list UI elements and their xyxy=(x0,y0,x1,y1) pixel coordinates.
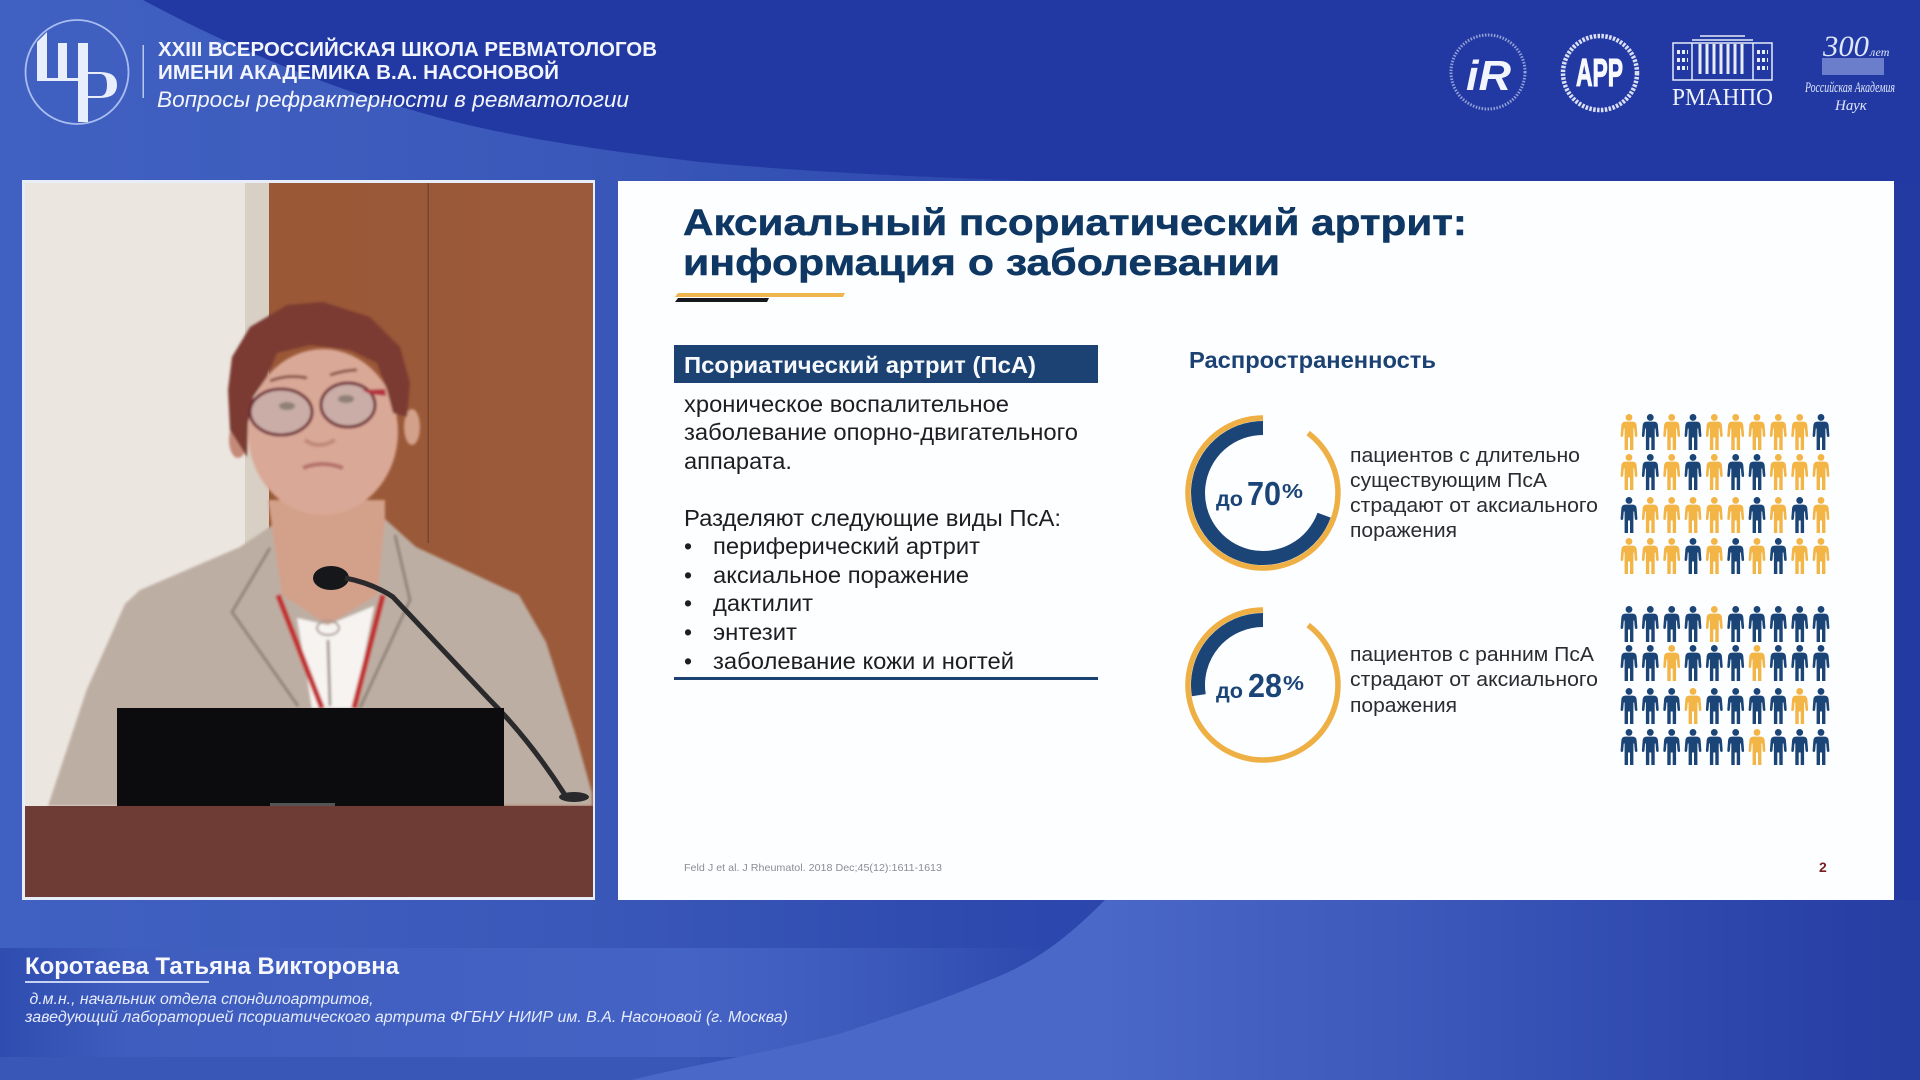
logo: 300 лет РАН: 300 xyxy=(1822,30,1869,63)
donut: 28% xyxy=(1188,610,1338,760)
definition heading bar xyxy=(674,345,1098,383)
text: 28% description: пациентов с ранним ПсА xyxy=(1350,644,1595,666)
pictogram: 28% xyxy=(1621,606,1829,765)
logo: АРР: АРР xyxy=(1576,52,1623,95)
donut: 28%: до xyxy=(1216,680,1243,703)
definition heading bar: Псориатический артрит (ПсА) xyxy=(684,352,1036,378)
definition text: заболевание опорно-двигательного xyxy=(684,419,1078,445)
speaker credentials: д.м.н., начальник отдела спондилоартритов, xyxy=(30,991,374,1008)
header: divider xyxy=(142,45,144,98)
donut: 28%: % xyxy=(1283,673,1304,695)
list of PsA forms: дактилит xyxy=(713,590,813,616)
definition text xyxy=(684,391,1078,531)
donut: 70% xyxy=(1188,418,1338,568)
list of PsA forms: • xyxy=(684,590,692,616)
title underline accent xyxy=(675,293,845,302)
speaker credentials xyxy=(24,991,788,1026)
list of PsA forms: периферический артрит xyxy=(713,533,980,559)
list of PsA forms: • xyxy=(684,562,692,588)
panel: speaker video xyxy=(22,180,595,900)
text: 28% description: поражения xyxy=(1350,695,1457,717)
donut: 28%: 28 xyxy=(1248,667,1282,704)
logo: iR: iR xyxy=(1466,52,1512,99)
text: 70% description: существующим ПсА xyxy=(1350,470,1548,492)
text: 70% description: пациентов с длительно xyxy=(1350,445,1580,467)
text: 70% description: страдают от аксиального xyxy=(1350,495,1598,517)
header: event title: Вопросы рефрактерности в ревматологии xyxy=(157,87,629,112)
definition text: хроническое воспалительное xyxy=(684,391,1009,417)
list of PsA forms: заболевание кожи и ногтей xyxy=(713,648,1014,674)
definition text: аппарата. xyxy=(684,448,792,474)
slide title: Аксиальный псориатический артрит: xyxy=(683,202,1467,243)
text: 28% description xyxy=(1350,644,1598,717)
definition text: Разделяют следующие виды ПсА: xyxy=(684,505,1061,531)
text: 70% description: поражения xyxy=(1350,520,1457,542)
slide title: информация о заболевании xyxy=(683,242,1280,283)
text: 70% description xyxy=(1350,445,1598,542)
header: school logo xyxy=(26,20,128,124)
citation: Feld J et al. J Rheumatol. 2018 Dec;45(12):1611-1613 xyxy=(684,862,942,874)
donut: 70%: до xyxy=(1216,488,1243,511)
list of PsA forms: энтезит xyxy=(713,619,797,645)
list of PsA forms xyxy=(684,533,1014,674)
slide title xyxy=(683,202,1467,283)
name underline xyxy=(25,981,209,983)
speaker name: Коротаева Татьяна Викторовна xyxy=(25,953,400,980)
logo: iR xyxy=(1451,35,1525,109)
logo: 300 лет РАН: Наук xyxy=(1834,98,1868,114)
pictogram: 70% xyxy=(1621,414,1829,574)
logo: РМАНПО xyxy=(1672,36,1773,111)
list of PsA forms: • xyxy=(684,648,692,674)
panel: slide xyxy=(618,181,1894,900)
page number: 2 xyxy=(1819,859,1827,875)
donut: 70%: 70 xyxy=(1247,475,1281,512)
text: 28% description: страдают от аксиального xyxy=(1350,669,1598,691)
donut: 70%: % xyxy=(1282,481,1303,503)
list of PsA forms: • xyxy=(684,619,692,645)
list of PsA forms: аксиальное поражение xyxy=(713,562,969,588)
list bottom rule xyxy=(674,677,1098,680)
logo: 300 лет РАН: лет xyxy=(1869,45,1890,59)
logo: АРР xyxy=(1563,36,1637,110)
header: event title: ИМЕНИ АКАДЕМИКА В.А. НАСОНОВОЙ xyxy=(158,60,559,84)
logo: РМАНПО: РМАНПО xyxy=(1672,85,1773,111)
header: event title: XXIII ВСЕРОССИЙСКАЯ ШКОЛА РЕВМАТОЛОГОВ xyxy=(158,37,657,61)
prevalence heading: Распространенность xyxy=(1189,347,1436,373)
list of PsA forms: • xyxy=(684,533,692,559)
logo: 300 лет РАН xyxy=(1804,30,1895,114)
speaker credentials: заведующий лабораторией псориатического артрита ФГБНУ НИИР им. В.А. Насоновой (г. Москва) xyxy=(24,1009,788,1026)
header: event title xyxy=(157,37,657,112)
